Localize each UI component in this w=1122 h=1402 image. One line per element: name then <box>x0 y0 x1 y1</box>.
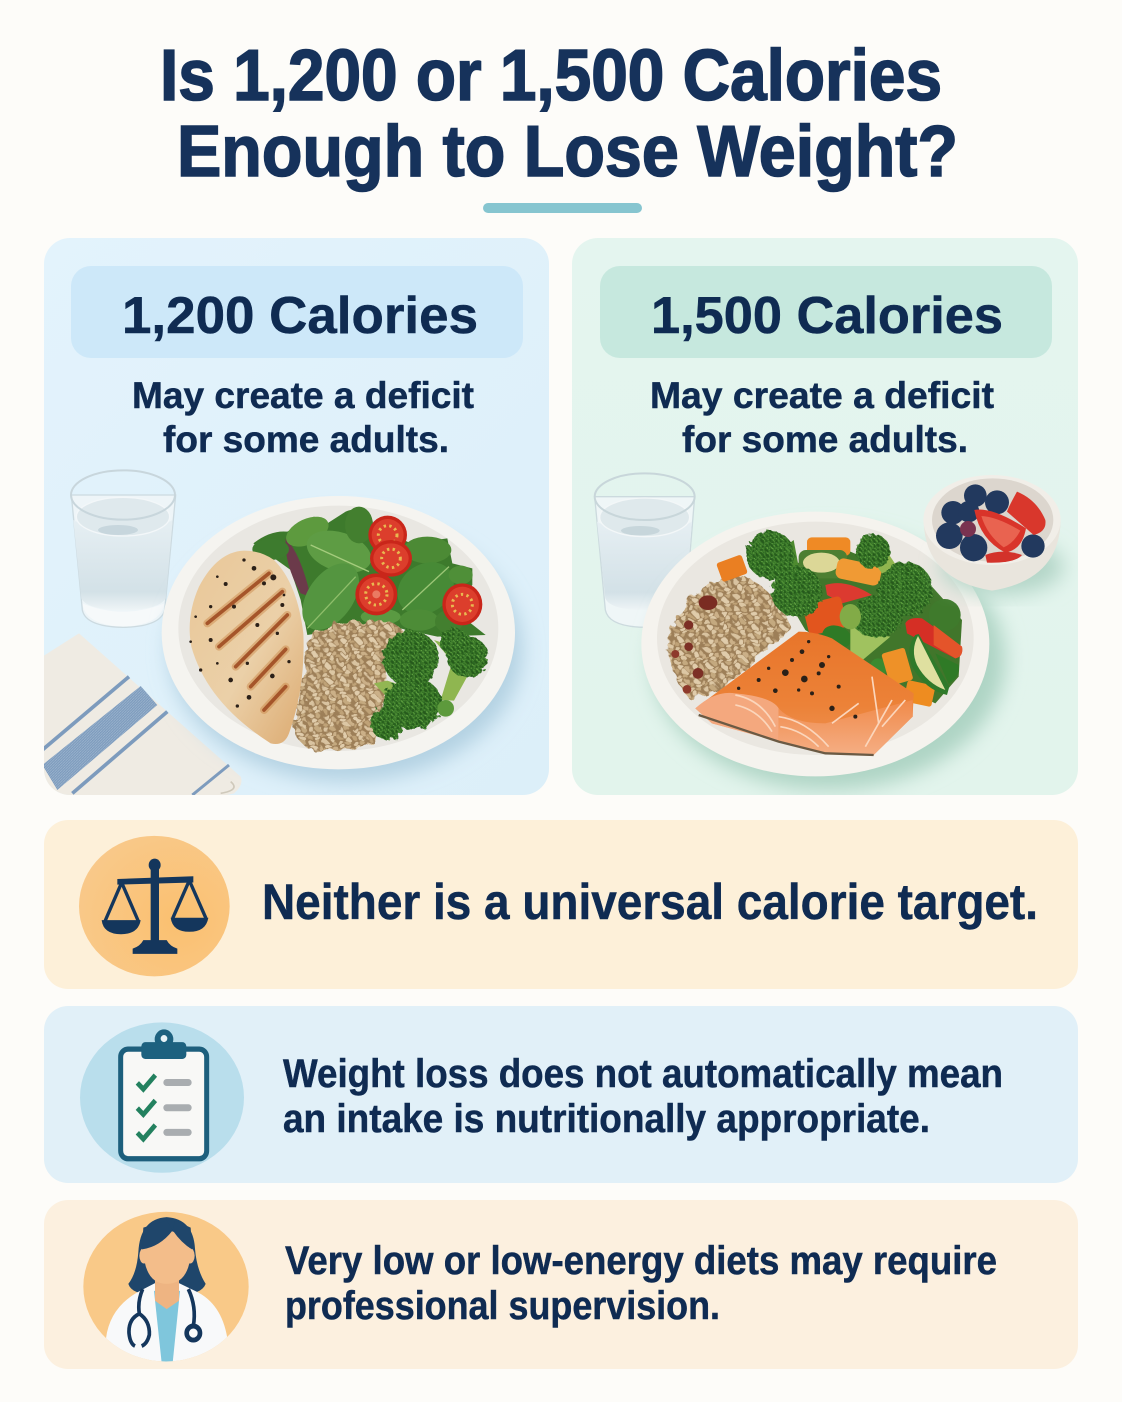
heading pill: 1,500 calories <box>600 266 1052 358</box>
icon: water glass <box>595 473 695 627</box>
blueberries <box>936 484 1045 561</box>
description: 1,500 calories <box>650 375 994 460</box>
description: 1,200 calories <box>132 375 474 460</box>
chicken breast <box>189 551 304 744</box>
banner text: Very low or low-energy diets may require <box>285 1239 997 1283</box>
banner: professional supervision <box>44 1200 1078 1369</box>
vegetables <box>716 537 962 707</box>
icon: water glass <box>71 470 176 627</box>
salad <box>252 507 486 640</box>
illustration: chicken meal <box>42 470 522 797</box>
description: 1,200 calories: May create a deficit <box>132 375 474 416</box>
plate <box>641 512 1005 790</box>
description: 1,200 calories: for some adults. <box>163 419 449 460</box>
description: 1,500 calories: May create a deficit <box>650 375 994 416</box>
banner: nutritionally appropriate <box>44 1006 1078 1183</box>
icon: balance scale <box>79 836 230 976</box>
banner text: professional supervision. <box>285 1284 720 1328</box>
title: Is 1,200 or 1,500 Calories <box>160 36 942 116</box>
heading pill: 1,200 calories: 1,200 Calories <box>122 287 478 345</box>
salmon fillet <box>695 632 914 755</box>
title underline <box>483 203 642 213</box>
banner: universal target <box>44 820 1078 989</box>
illustration: salmon meal <box>595 473 1064 790</box>
broccoli <box>746 531 933 663</box>
description: 1,500 calories: for some adults. <box>682 419 968 460</box>
banner text: Neither is a universal calorie target. <box>262 874 1038 930</box>
panel: 1,200 calories <box>42 238 549 797</box>
banner text <box>283 1052 1003 1141</box>
strawberries <box>974 492 1046 563</box>
tomatoes <box>355 516 482 625</box>
quinoa <box>292 621 406 751</box>
quinoa <box>667 575 790 698</box>
fruit bowl <box>923 475 1064 595</box>
banner text: Weight loss does not automatically mean <box>283 1052 1003 1096</box>
heading pill: 1,200 calories <box>71 266 523 358</box>
icon: clipboard checklist <box>80 1022 244 1173</box>
banner text: an intake is nutritionally appropriate. <box>283 1097 930 1141</box>
broccoli <box>371 628 488 740</box>
title <box>160 36 958 192</box>
icon: doctor <box>83 1212 249 1368</box>
panel: 1,500 calories <box>572 238 1078 795</box>
icon: striped napkin <box>42 633 241 797</box>
plate <box>162 496 522 782</box>
heading pill: 1,500 calories: 1,500 Calories <box>651 287 1003 345</box>
banner text <box>285 1239 997 1328</box>
title: Enough to Lose Weight? <box>177 112 958 192</box>
